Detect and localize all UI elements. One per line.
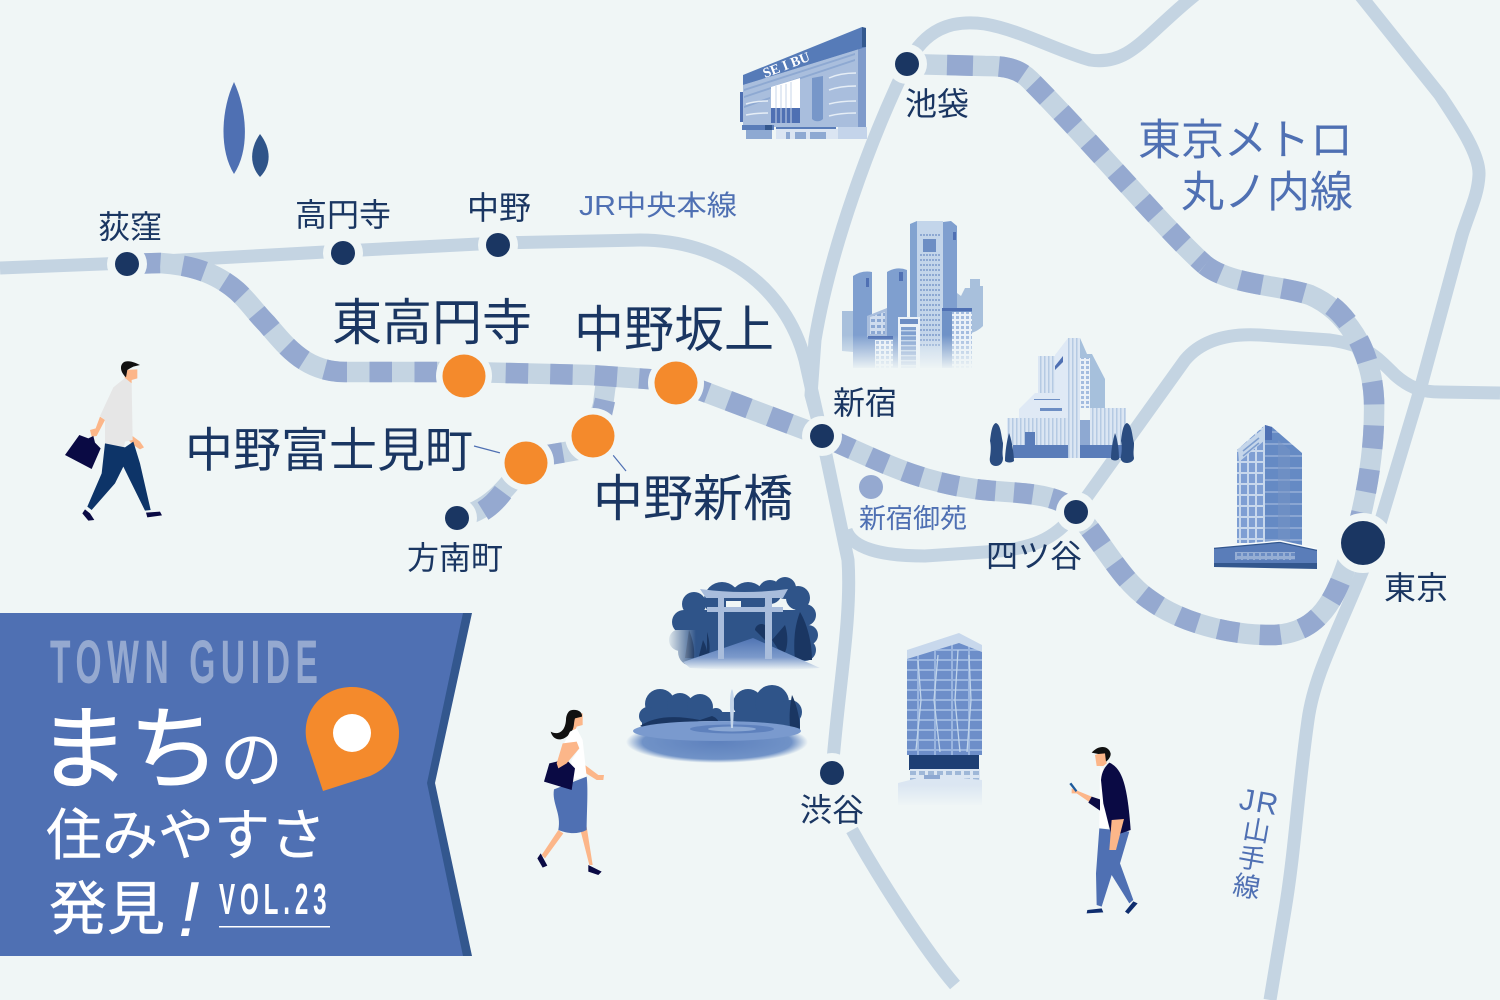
person: walking man with bag bbox=[65, 361, 162, 521]
line labels: JR中央本線 bbox=[579, 190, 737, 221]
line labels: 山 bbox=[1241, 814, 1272, 848]
trees bbox=[990, 423, 1134, 466]
featured stations: 東高円寺 bbox=[332, 295, 532, 351]
title banner bbox=[0, 613, 472, 956]
title: sumiyasusa: 住みやすさ bbox=[46, 804, 326, 867]
person: walking woman bbox=[537, 710, 604, 875]
title: no: の bbox=[220, 726, 283, 796]
line labels: JR bbox=[1237, 783, 1283, 822]
line labels: 新宿御苑 bbox=[859, 504, 967, 534]
person: man with phone bbox=[1069, 747, 1138, 914]
featured stations: 中野富士見町 bbox=[185, 425, 473, 478]
illustration: park with fountain bbox=[626, 685, 808, 763]
station labels: 東京 bbox=[1384, 570, 1448, 606]
illustration: shrine torii in forest bbox=[666, 577, 820, 670]
title: machi: まち bbox=[38, 700, 220, 801]
station labels: 荻窪 bbox=[98, 209, 162, 245]
station labels: 中野 bbox=[467, 190, 531, 226]
featured stations bbox=[185, 295, 793, 527]
leader lines bbox=[474, 446, 626, 471]
station labels: 方南町 bbox=[407, 540, 503, 576]
decoration: leaves bbox=[223, 82, 269, 177]
volume: VOL.23 bbox=[219, 874, 331, 924]
line labels: 東京メトロ bbox=[1138, 117, 1353, 165]
line labels: 線 bbox=[1231, 870, 1262, 904]
line labels: 手 bbox=[1236, 842, 1267, 876]
icon: map pin bbox=[306, 687, 399, 791]
line labels: 丸ノ内線 bbox=[1181, 169, 1353, 217]
station labels: 池袋 bbox=[905, 86, 969, 122]
building: Tokyo tower bbox=[1214, 425, 1317, 569]
building: Seibu department store: SE I BU bbox=[761, 50, 812, 82]
exclamation: ! bbox=[178, 865, 200, 953]
station labels: 新宿 bbox=[833, 385, 897, 421]
station labels: 四ツ谷 bbox=[986, 538, 1082, 574]
featured stations: 中野新橋 bbox=[593, 471, 793, 527]
rail: Honancho branch bbox=[457, 382, 606, 518]
station markers bbox=[107, 44, 1393, 793]
title: hakken: 発見 bbox=[49, 877, 165, 942]
station labels bbox=[98, 86, 1448, 828]
building: Shibuya tower bbox=[895, 633, 987, 807]
TOWN GUIDE heading: TOWN GUIDE bbox=[50, 628, 324, 697]
station labels: 高円寺 bbox=[295, 197, 391, 233]
building: Seibu department store bbox=[740, 27, 867, 139]
featured stations: 中野坂上 bbox=[574, 302, 774, 358]
building: Shinjuku midrise with trees bbox=[990, 338, 1134, 466]
station labels: 渋谷 bbox=[800, 792, 864, 828]
building: Shinjuku skyscrapers bbox=[840, 221, 985, 370]
line labels bbox=[579, 117, 1353, 904]
rail: Marunouchi line bbox=[127, 64, 1374, 635]
